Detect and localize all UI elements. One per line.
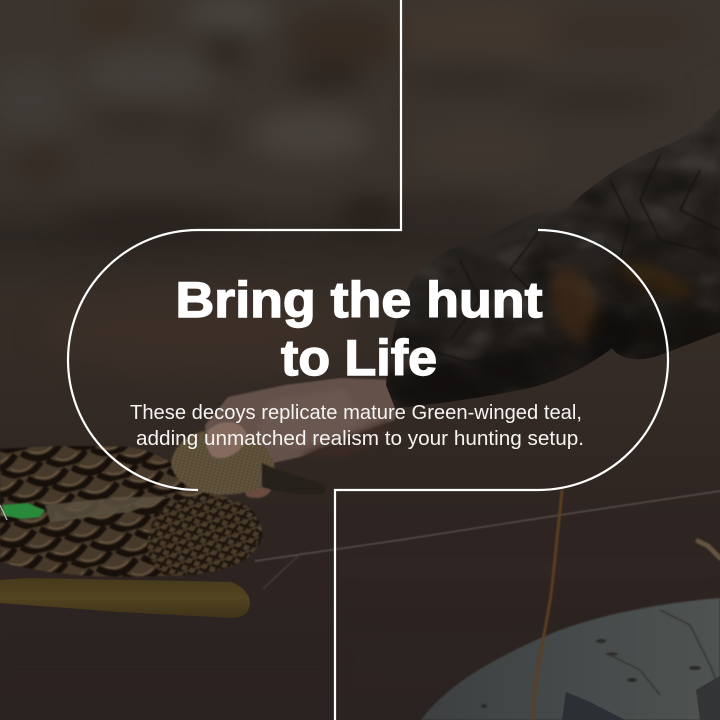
head	[171, 430, 275, 495]
title: Bring the hunt	[176, 271, 543, 328]
outline: upper-left line into pill	[68, 0, 401, 490]
finger over head	[206, 422, 248, 458]
wing speculum	[3, 503, 45, 519]
body	[0, 446, 262, 577]
outline: lower-right line out of pill	[335, 230, 668, 720]
photo: boat hull	[421, 598, 720, 720]
beak	[262, 463, 326, 495]
photo: fishing line across water	[255, 491, 720, 589]
flank	[45, 497, 170, 522]
title	[176, 271, 543, 386]
keel	[0, 578, 250, 618]
photo: hand	[205, 378, 395, 498]
photo: camouflage sleeve	[380, 100, 720, 420]
description text: These decoys replicate mature Green-winged teal,	[130, 401, 582, 424]
breast scales	[148, 496, 260, 575]
title: to Life	[281, 329, 437, 386]
water streaks	[0, 560, 720, 670]
photo: twig	[533, 491, 720, 720]
description text	[130, 401, 584, 450]
description text: adding unmatched realism to your hunting setup.	[136, 427, 584, 450]
photo: duck decoy	[0, 422, 326, 618]
